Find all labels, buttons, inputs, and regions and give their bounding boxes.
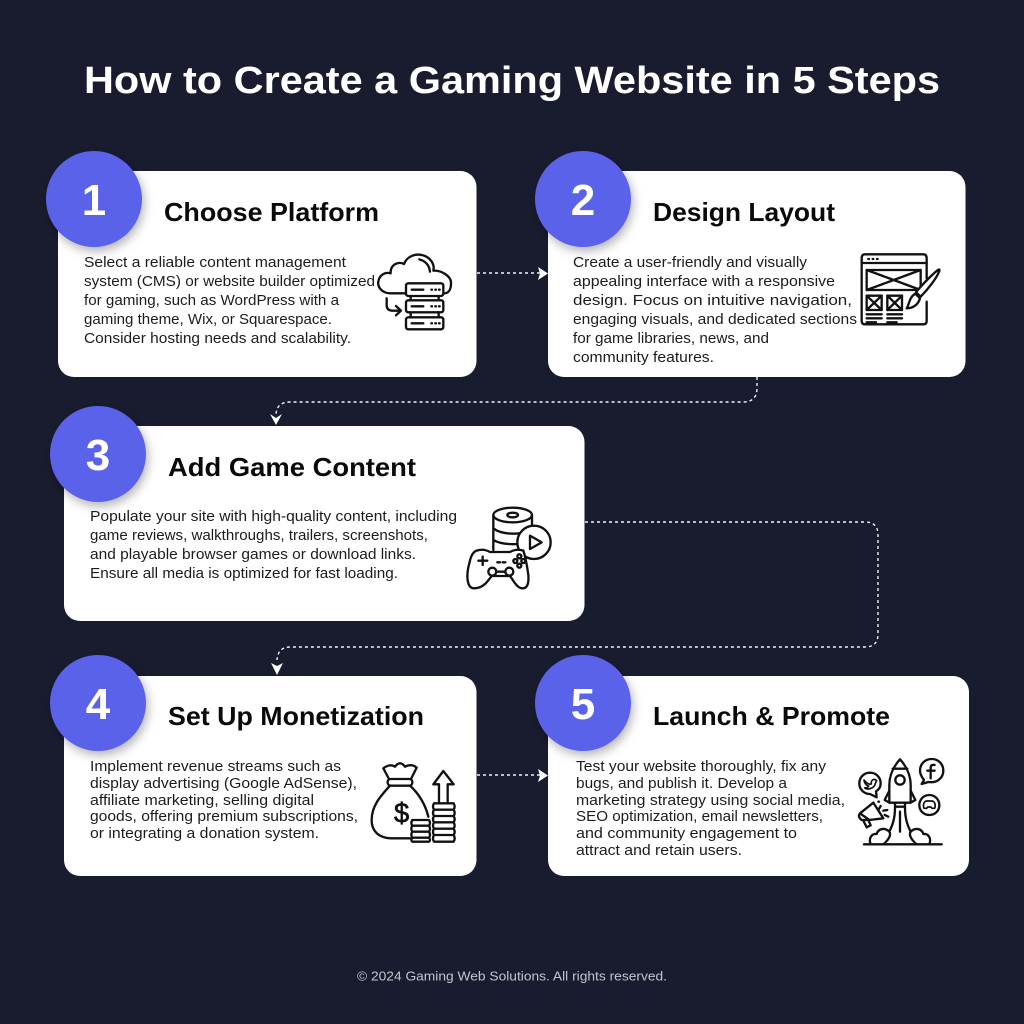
text: step 4 description: Implement revenue streams such as: [90, 758, 341, 775]
heading: launch and promote: Launch & Promote: [653, 701, 890, 731]
panel: step 2 design layout: [535, 151, 966, 377]
text: step 2 description: design. Focus on intuitive navigation,: [573, 292, 852, 309]
panel: step 3 add game content: [50, 406, 584, 621]
icon: money bag and coins: $: [394, 797, 409, 828]
text: step 3 description: Populate your site with high-quality content, including: [90, 508, 457, 525]
panel: step 5 launch and promote: [535, 655, 969, 876]
text: step 1 description: gaming theme, Wix, or Squarespace.: [84, 311, 332, 328]
text: step 2 description: for game libraries, news, and: [573, 330, 769, 347]
text: step 5 description: bugs, and publish it. Develop a: [576, 775, 788, 792]
text: step 2 description: community features.: [573, 349, 714, 366]
arrow: step 4 to step 5: [477, 769, 548, 782]
text: step 5 description: attract and retain users.: [576, 842, 742, 859]
icon: rocket and social media: [859, 759, 943, 844]
panel: step 3 add game content: 3: [86, 431, 110, 480]
text: step 3 description: Ensure all media is optimized for fast loading.: [90, 565, 398, 582]
title: How to Create a Gaming Website in 5 Steps: [84, 60, 940, 102]
panel: step 5 launch and promote: 5: [571, 680, 595, 729]
text: step 2 description: [573, 254, 857, 366]
icon: game controller and media: [467, 508, 551, 588]
icon: money bag and coins: [372, 763, 455, 842]
text: step 1 description: system (CMS) or website builder optimized: [84, 273, 375, 290]
text: step 4 description: display advertising (Google AdSense),: [90, 775, 357, 792]
text: step 3 description: [90, 508, 457, 582]
panel: step 4 set up monetization: [50, 655, 476, 876]
text: step 5 description: Test your website thoroughly, fix any: [576, 758, 827, 775]
text: step 3 description: and playable browser games or download links.: [90, 546, 416, 563]
icon: cloud server: [378, 255, 451, 329]
text: step 5 description: SEO optimization, email newsletters,: [576, 808, 823, 825]
heading: choose platform: Choose Platform: [164, 197, 379, 227]
arrow: step 2 to step 3: [270, 377, 757, 425]
icon: layout and brush: [862, 254, 940, 324]
text: step 2 description: appealing interface with a responsive: [573, 273, 835, 290]
footer: © 2024 Gaming Web Solutions. All rights reserved.: [357, 968, 667, 984]
panel: step 1 choose platform: 1: [82, 176, 106, 225]
text: step 1 description: for gaming, such as WordPress with a: [84, 292, 340, 309]
heading: set up monetization: Set Up Monetization: [168, 701, 424, 731]
panel: step 4 set up monetization: 4: [86, 680, 111, 729]
text: step 4 description: [90, 758, 358, 842]
text: step 2 description: Create a user-friendly and visually: [573, 254, 808, 271]
heading: design layout: Design Layout: [653, 197, 835, 227]
text: step 3 description: game reviews, walkthroughs, trailers, screenshots,: [90, 527, 428, 544]
text: step 1 description: Select a reliable content management: [84, 254, 347, 271]
text: step 1 description: Consider hosting needs and scalability.: [84, 330, 351, 347]
panel: step 1 choose platform: [46, 151, 476, 377]
text: step 5 description: marketing strategy using social media,: [576, 792, 845, 809]
arrow: step 1 to step 2: [477, 267, 548, 280]
text: step 4 description: affiliate marketing, selling digital: [90, 792, 314, 809]
text: step 5 description: and community engagement to: [576, 825, 797, 842]
text: step 1 description: [84, 254, 375, 347]
text: step 4 description: goods, offering premium subscriptions,: [90, 808, 358, 825]
text: step 2 description: engaging visuals, and dedicated sections: [573, 311, 857, 328]
panel: step 2 design layout: 2: [571, 176, 595, 225]
heading: add game content: Add Game Content: [168, 452, 416, 482]
arrow: step 3 to step 4: [271, 522, 878, 675]
text: step 4 description: or integrating a donation system.: [90, 825, 319, 842]
text: step 5 description: [576, 758, 845, 859]
